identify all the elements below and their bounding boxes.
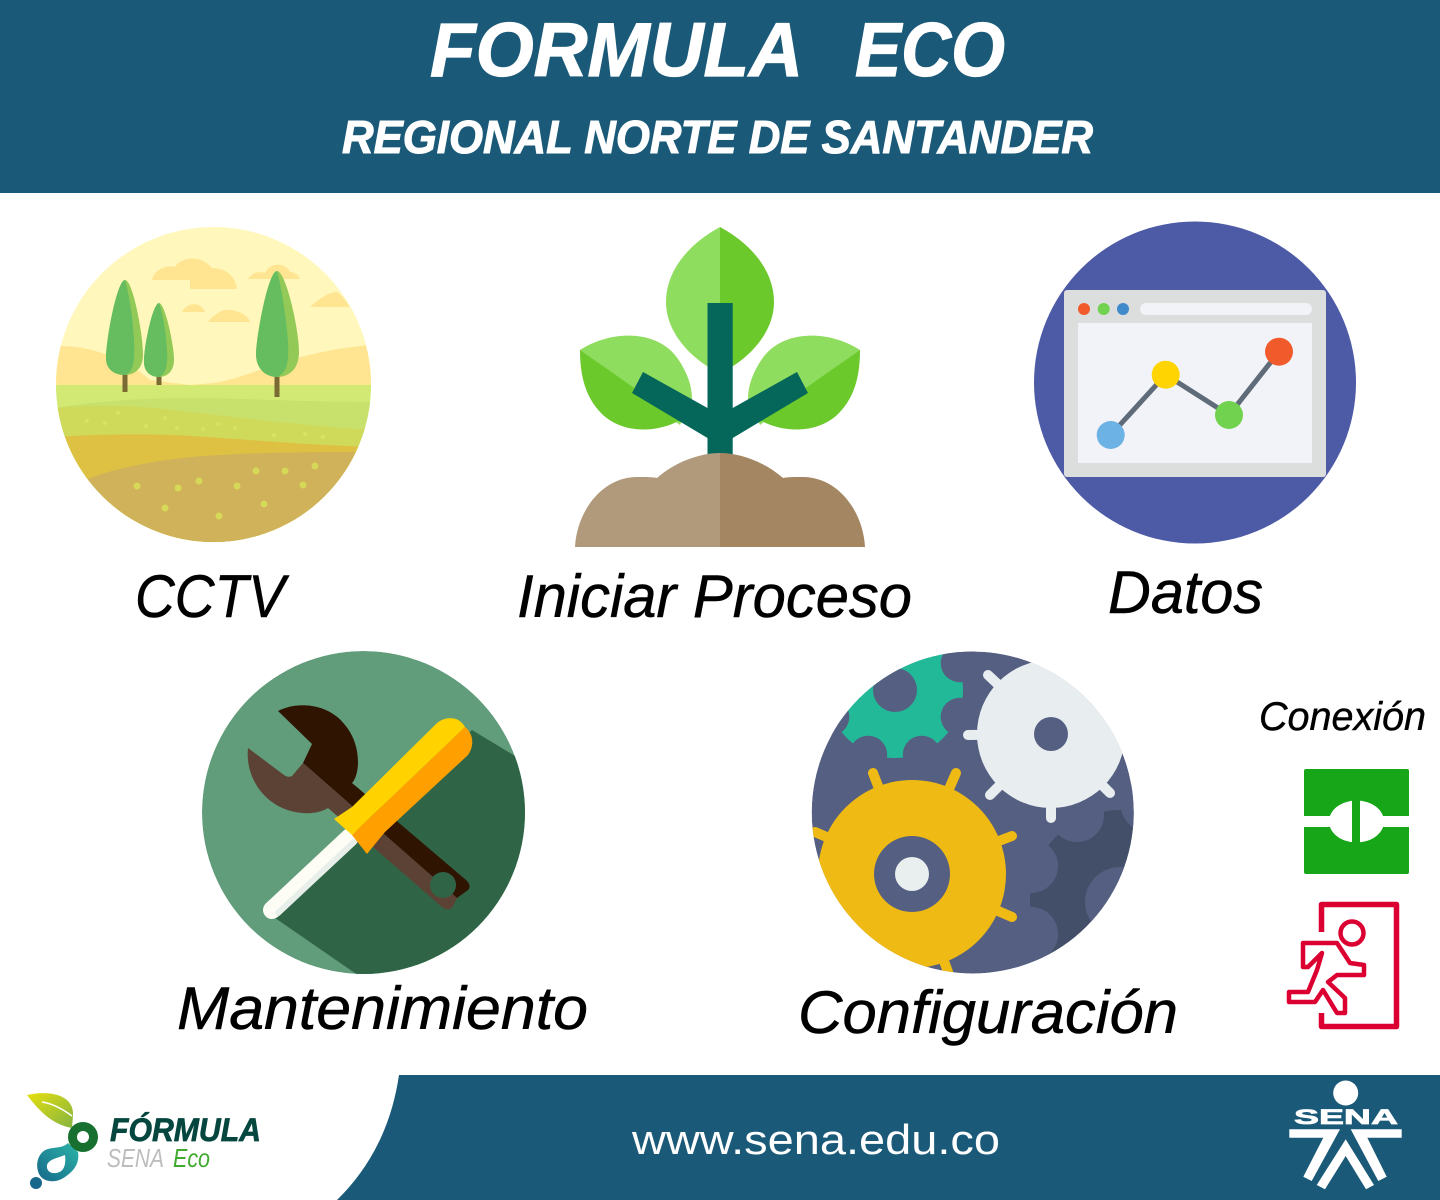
subtitle: REGIONAL NORTE DE SANTANDER xyxy=(342,111,1093,163)
icon: chain link xyxy=(30,1122,98,1189)
tree 1 xyxy=(106,280,143,392)
icon: green plug connection xyxy=(1304,769,1409,874)
top leaf xyxy=(666,227,774,373)
title xyxy=(430,8,1005,93)
dark gear xyxy=(1030,784,1134,961)
logo wordmark: FÓRMULA xyxy=(110,1112,261,1148)
icon: red exit door xyxy=(1289,904,1396,1026)
screwdriver xyxy=(272,718,472,913)
yellow gear xyxy=(815,773,1012,972)
stem xyxy=(632,303,808,456)
wrench xyxy=(248,705,470,909)
soil mound xyxy=(575,453,865,547)
icon: leaf xyxy=(27,1093,73,1128)
teal gear xyxy=(831,652,975,758)
tree 2 xyxy=(144,303,174,385)
logo eco: Eco xyxy=(173,1143,210,1173)
website url: www.sena.edu.co xyxy=(631,1116,1000,1163)
logo: SENA xyxy=(1289,1080,1402,1189)
left leaf xyxy=(580,336,692,430)
icon: CCTV landscape xyxy=(56,227,372,545)
label: Iniciar Proceso: Iniciar Proceso xyxy=(517,563,912,630)
title: FORMULA xyxy=(430,8,803,93)
icon: wrench and screwdriver xyxy=(202,651,530,980)
icon: plant sprout xyxy=(575,227,865,547)
logo subtitle: SENA xyxy=(107,1143,164,1173)
header band xyxy=(0,0,1440,193)
footer band xyxy=(337,1075,1440,1200)
label: Conexión: Conexión xyxy=(1259,695,1426,739)
line chart xyxy=(1097,338,1293,449)
right leaf xyxy=(748,336,860,430)
white gear xyxy=(968,660,1125,818)
logo: Formula SENA Eco xyxy=(27,1093,261,1189)
icon: gears xyxy=(812,652,1134,974)
tree 3 xyxy=(256,271,299,397)
label: Mantenimiento: Mantenimiento xyxy=(177,975,588,1042)
icon: data chart window xyxy=(1034,222,1356,544)
logo: SENA: SENA xyxy=(1294,1106,1398,1129)
label: Configuración: Configuración xyxy=(798,979,1178,1046)
label: Datos: Datos xyxy=(1108,559,1263,626)
title: ECO xyxy=(855,8,1005,93)
label: CCTV: CCTV xyxy=(135,563,290,630)
